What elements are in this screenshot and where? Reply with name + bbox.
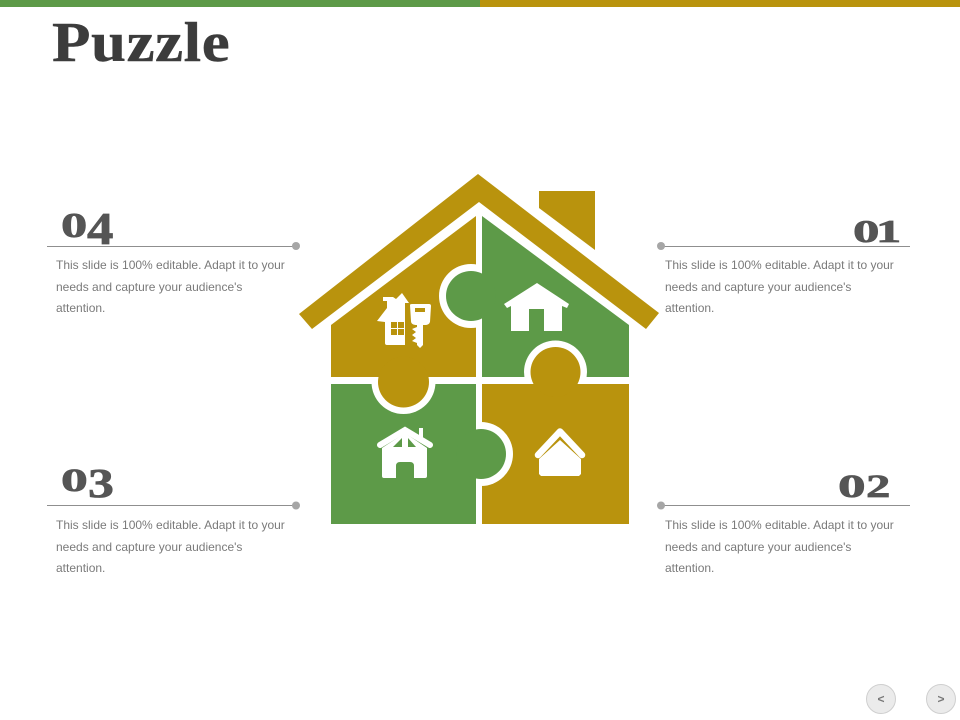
icon: house with key xyxy=(377,293,431,348)
puzzle piece: top right xyxy=(446,216,629,384)
text block 03 xyxy=(56,518,285,575)
previous button xyxy=(866,684,896,714)
text block 01: This slide is 100% editable. Adapt it to your xyxy=(665,258,894,272)
text block 04 xyxy=(56,258,285,315)
number 02 xyxy=(838,469,890,505)
text block 02: attention. xyxy=(665,561,714,575)
text block 02 xyxy=(665,518,894,575)
text: 4 xyxy=(87,202,113,254)
next button xyxy=(926,684,956,714)
text block 01: needs and capture your audience's xyxy=(665,280,851,294)
chimney xyxy=(539,191,595,250)
text: 0 xyxy=(61,463,88,499)
text: 1 xyxy=(876,214,901,249)
text block 03: attention. xyxy=(56,561,105,575)
text block 02: This slide is 100% editable. Adapt it to your xyxy=(665,518,894,532)
roof xyxy=(299,174,659,329)
number 03 xyxy=(61,460,114,506)
leader line 03 xyxy=(47,502,300,510)
icon: simple house xyxy=(538,432,582,476)
house puzzle graphic xyxy=(299,174,659,524)
number 04 xyxy=(61,202,113,254)
icon: house with attic xyxy=(380,428,430,478)
text block 03: This slide is 100% editable. Adapt it to your xyxy=(56,518,285,532)
title: Puzzle xyxy=(52,11,230,73)
text block 04: needs and capture your audience's xyxy=(56,280,242,294)
text block 03: needs and capture your audience's xyxy=(56,540,242,554)
text: 2 xyxy=(866,469,890,505)
text: 0 xyxy=(838,469,866,505)
previous button: < xyxy=(877,692,885,706)
text block 04: attention. xyxy=(56,301,105,315)
top colour bar xyxy=(0,0,960,7)
icon: house on green piece xyxy=(504,283,569,331)
text block 04: This slide is 100% editable. Adapt it to your xyxy=(56,258,285,272)
number 01 xyxy=(853,214,901,249)
puzzle piece: bottom left xyxy=(331,350,506,524)
leader line 04 xyxy=(47,242,300,250)
puzzle piece: top left xyxy=(331,216,503,408)
leader line 01 xyxy=(657,242,910,250)
text: 0 xyxy=(61,206,87,245)
text block 01: attention. xyxy=(665,301,714,315)
text block 02: needs and capture your audience's xyxy=(665,540,851,554)
puzzle piece: bottom right xyxy=(449,384,629,524)
text: 3 xyxy=(88,460,114,506)
text block 01 xyxy=(665,258,894,315)
text: 0 xyxy=(853,214,879,249)
next button: > xyxy=(937,692,945,706)
leader line 02 xyxy=(657,502,910,510)
